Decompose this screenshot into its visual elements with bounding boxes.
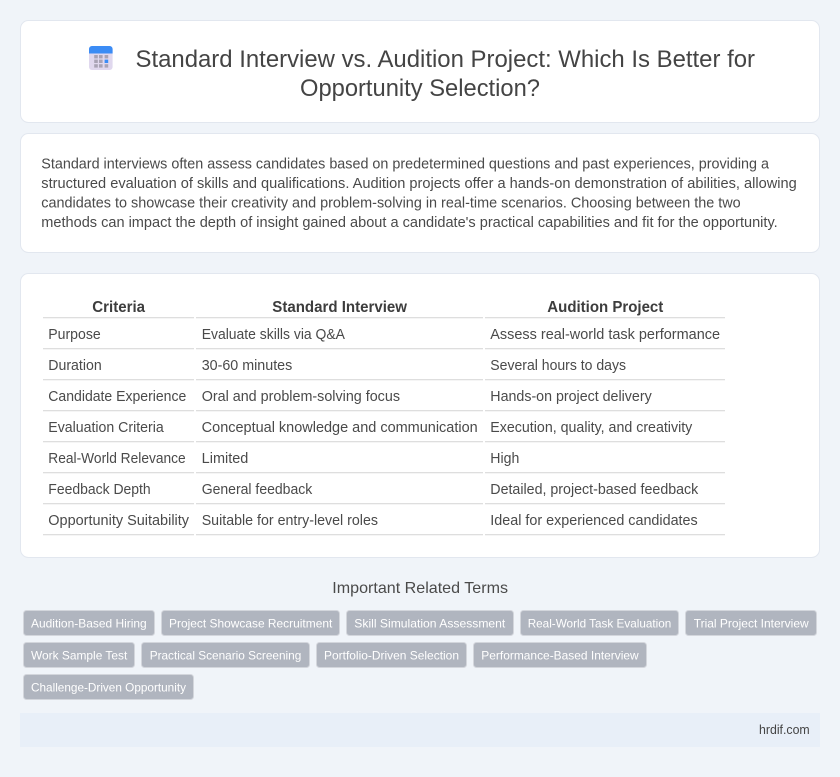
panel: header [20,20,820,122]
table header row: Standard Interview [272,299,408,316]
tag: work sample test [24,642,134,668]
tag: performance-based interview [474,642,646,668]
row: opportunity suitability [48,513,698,529]
icon: calendar [89,46,113,70]
row: opportunity suitability: Suitable for entry-level roles [202,513,378,529]
row: real-world relevance: Limited [202,451,248,467]
row: real-world relevance [48,451,519,467]
title: Opportunity Selection? [300,75,540,102]
panel: comparison table [20,274,820,558]
row: real-world relevance: High [490,451,519,467]
row: evaluation criteria: Conceptual knowledge and communication [202,420,478,436]
tag: trial project interview [686,610,816,636]
tag: audition-based hiring [24,610,154,636]
tag: audition-based hiring: Audition-Based Hiring [31,616,147,630]
row: candidate experience: Hands-on project delivery [490,389,652,405]
tag: practical scenario screening [142,642,310,668]
tag: project showcase recruitment: Project Showcase Recruitment [169,616,333,630]
row: evaluation criteria: Evaluation Criteria [48,420,164,436]
row: purpose [48,327,720,343]
tag: work sample test: Work Sample Test [31,648,128,662]
title: Standard Interview vs. Audition Project: Which Is Better for [136,46,755,73]
row: opportunity suitability: Ideal for experienced candidates [490,513,698,529]
tag: real-world task evaluation: Real-World Task Evaluation [528,616,671,630]
tag: skill simulation assessment [346,610,514,636]
text block: introduction: methods can impact the depth of insight gained about a candidate's practical capabilities and fit for the opportunity. [41,215,778,231]
row: feedback depth: Detailed, project-based feedback [490,482,699,498]
panel: description [20,134,820,252]
tag: challenge-driven opportunity: Challenge-Driven Opportunity [31,680,186,694]
row: opportunity suitability: Opportunity Suitability [48,513,190,529]
table header row [92,299,664,316]
row: feedback depth [48,482,699,498]
tag: portfolio-driven selection: Portfolio-Driven Selection [324,648,459,662]
footer [20,713,820,747]
row: purpose: Evaluate skills via Q&A [202,327,345,343]
row: purpose: Purpose [48,327,101,343]
text block: introduction: Standard interviews often assess candidates based on predetermined questions and past experiences, providing a [41,156,769,172]
row: purpose: Assess real-world task performance [490,327,720,343]
table header row: Audition Project [547,299,664,316]
tag: challenge-driven opportunity [24,674,194,700]
tag: portfolio-driven selection [316,642,466,668]
row: evaluation criteria: Execution, quality, and creativity [490,420,693,436]
tag: project showcase recruitment [162,610,340,636]
title [136,46,755,102]
tag: performance-based interview: Performance-Based Interview [481,648,639,662]
panel: related term tags [24,610,816,700]
row: evaluation criteria [48,420,693,436]
row: candidate experience [48,389,652,405]
tag: skill simulation assessment: Skill Simulation Assessment [354,616,506,630]
tag: real-world task evaluation [520,610,678,636]
row: duration: Several hours to days [490,358,626,374]
row: duration: 30-60 minutes [202,358,292,374]
row: candidate experience: Oral and problem-solving focus [202,389,400,405]
text block: introduction: candidates to showcase their creativity and problem-solving in real-time scenarios. Choosing between the two [41,195,741,211]
text block: introduction: structured evaluation of skills and qualifications. Audition projects offer a hands-on demonstration of abilities, allowing [41,176,797,192]
row: feedback depth: General feedback [202,482,313,498]
tag: trial project interview: Trial Project Interview [694,616,809,630]
text block: introduction [41,156,797,231]
tag: practical scenario screening: Practical Scenario Screening [150,648,301,662]
heading: important related terms: Important Related Terms [332,580,508,597]
row: feedback depth: Feedback Depth [48,482,151,498]
row: duration: Duration [48,358,102,374]
footer: hrdif.com [759,722,810,737]
table header row: Criteria [92,299,145,316]
row: duration [48,358,626,374]
row: candidate experience: Candidate Experience [48,389,186,405]
row: real-world relevance: Real-World Relevance [48,451,186,467]
